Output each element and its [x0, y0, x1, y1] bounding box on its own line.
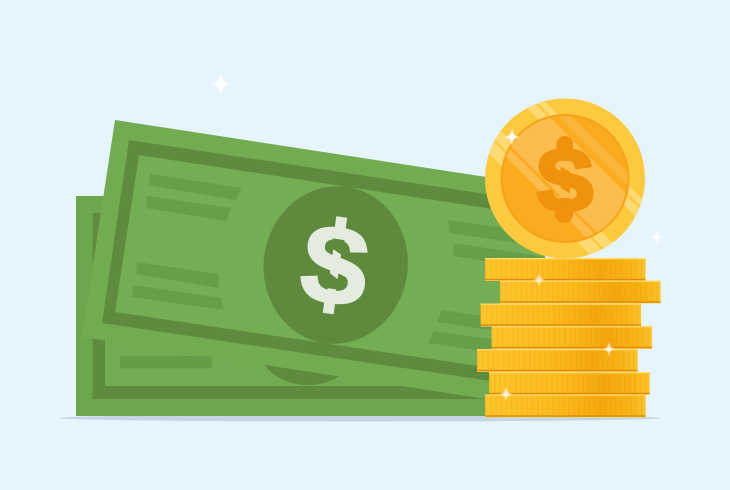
large gold coin — [485, 98, 645, 258]
sparkles — [210, 72, 664, 402]
coin stack — [477, 258, 661, 418]
front banknote — [82, 120, 545, 408]
banknote dollar sign: $ — [294, 200, 376, 332]
banknote inner frame — [102, 140, 545, 389]
illustration: money and coins — [60, 74, 662, 422]
banknote medallion — [253, 177, 418, 353]
ground shadow — [60, 414, 660, 422]
back banknote — [76, 196, 496, 416]
coin dollar sign: $ — [537, 131, 593, 231]
banknote text lines — [132, 174, 545, 360]
